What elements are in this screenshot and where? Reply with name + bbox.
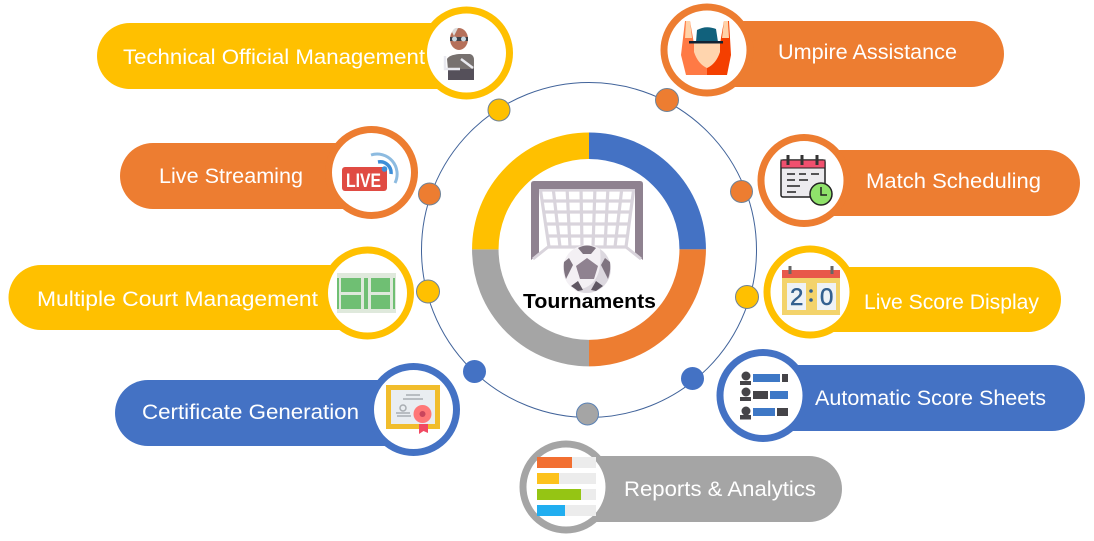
icon: score board: 0 <box>820 284 833 311</box>
item: Umpire Assistance: Umpire Assistance <box>778 41 957 64</box>
icon: goal and ball <box>531 181 643 293</box>
icon: umpire <box>681 21 731 75</box>
item: Certificate Generation: Certificate Generation <box>142 401 359 424</box>
icon: score board: 2 <box>790 284 803 311</box>
item: Technical Official Management: Technical Official Management <box>123 46 425 69</box>
item: Reports & Analytics <box>523 444 842 530</box>
icon: bars <box>537 457 596 516</box>
item: Certificate Generation <box>115 366 456 452</box>
item: Multiple Court Management: Multiple Court Management <box>37 288 318 311</box>
icon: live <box>342 154 397 192</box>
item: Match Scheduling: Match Scheduling <box>866 170 1041 193</box>
icon: calendar and clock <box>781 155 832 205</box>
icon: live: LIVE <box>346 171 381 192</box>
title: Tournaments: Tournaments <box>523 291 656 313</box>
item: Automatic Score Sheets <box>720 352 1085 438</box>
item: Multiple Court Management <box>9 250 411 336</box>
icon: certificate <box>386 385 440 434</box>
item: Reports & Analytics: Reports & Analytics <box>624 478 816 501</box>
icon: score board <box>782 266 840 315</box>
icon: court <box>337 273 396 313</box>
icon: official <box>445 28 474 80</box>
item: Technical Official Management <box>97 10 510 96</box>
item: Match Scheduling <box>761 138 1080 224</box>
connector dots <box>416 88 758 425</box>
item: Live Score Display: Live Score Display <box>864 291 1040 314</box>
item: Umpire Assistance <box>664 7 1004 93</box>
item: Automatic Score Sheets: Automatic Score Sheets <box>815 387 1046 410</box>
item: Live Streaming <box>120 130 414 216</box>
orbit ring <box>422 82 756 418</box>
item: Live Score Display <box>767 249 1061 335</box>
item: Live Streaming: Live Streaming <box>159 165 303 188</box>
donut ring <box>485 146 693 353</box>
icon: score sheet <box>740 372 788 420</box>
